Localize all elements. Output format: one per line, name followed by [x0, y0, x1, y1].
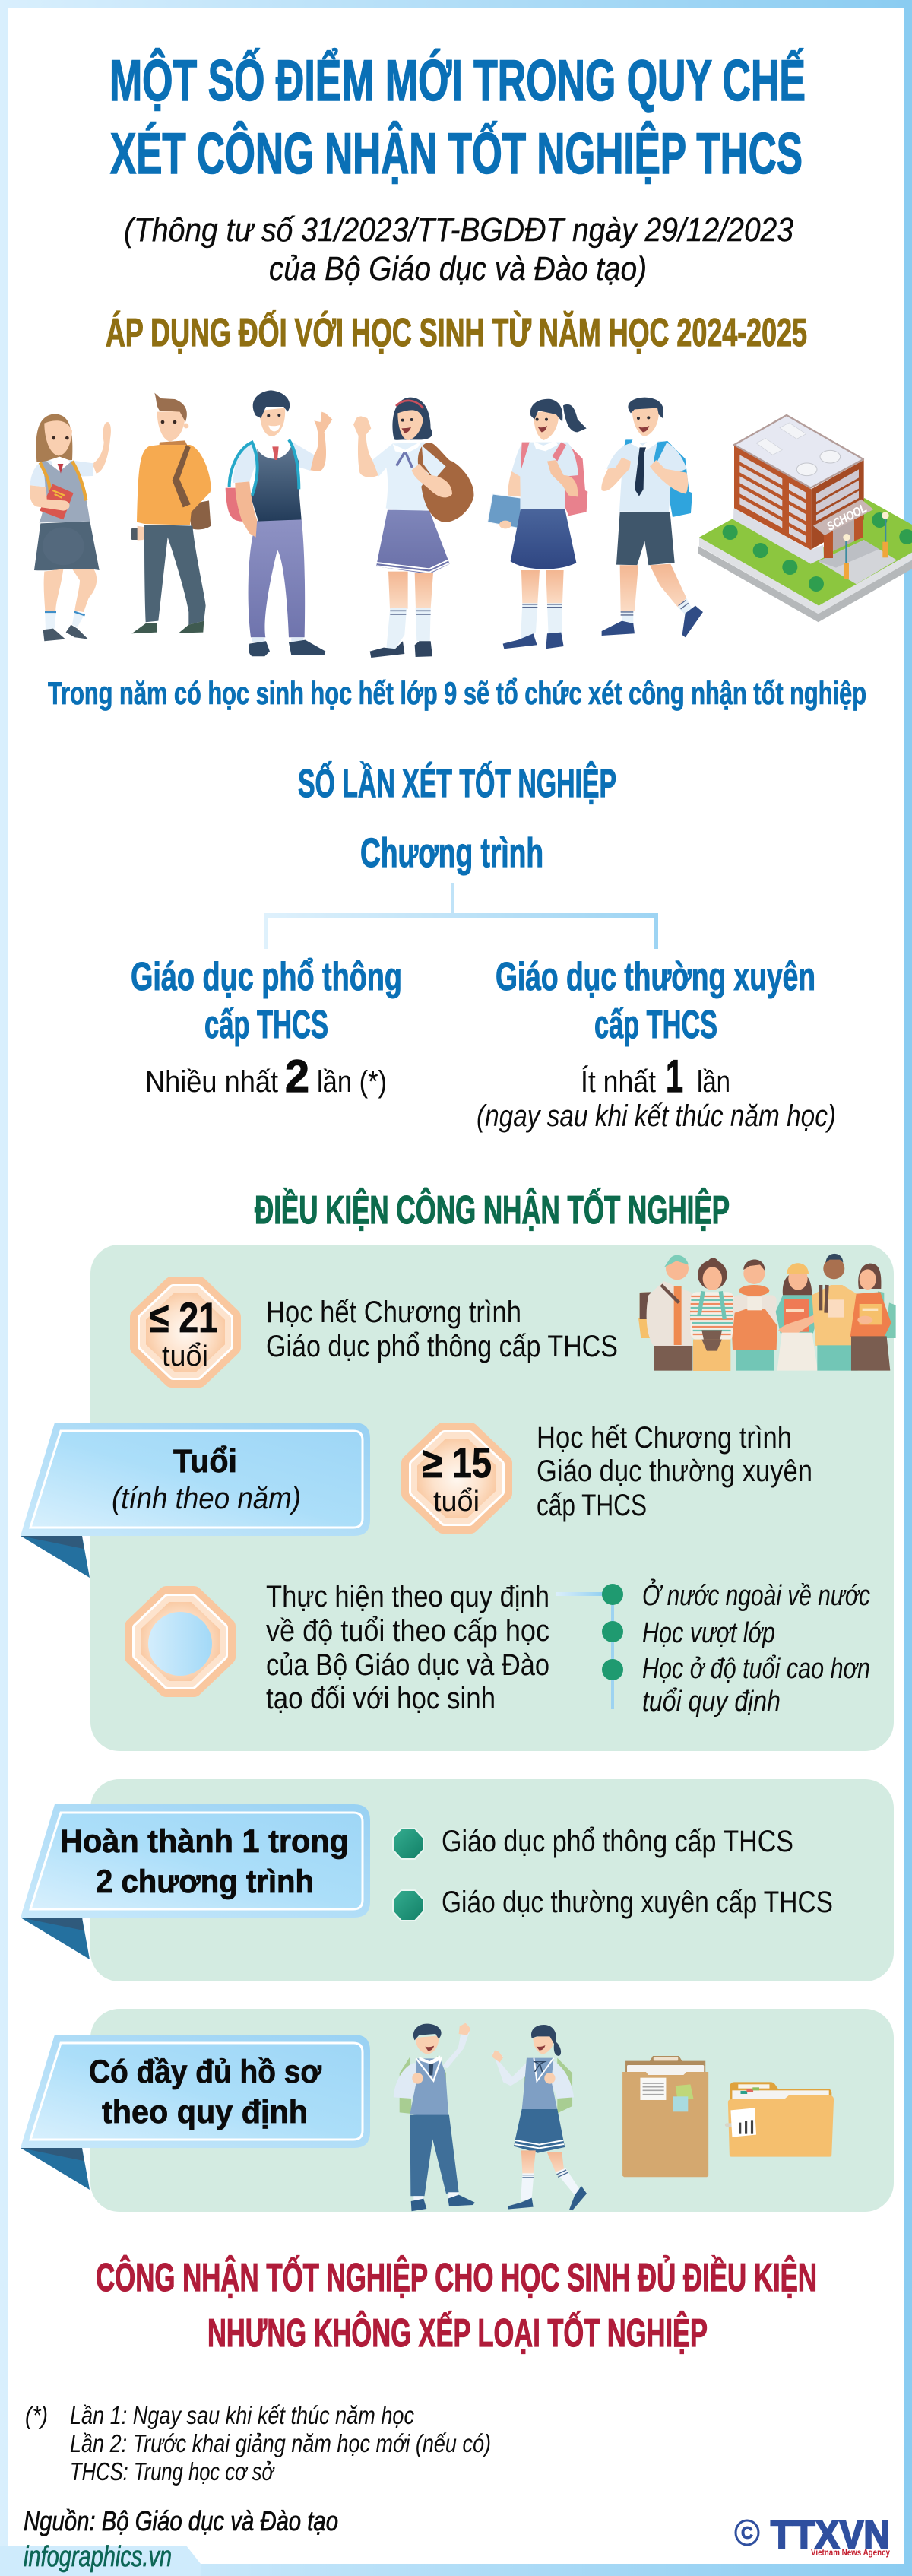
text: continuing education age: cấp THCS [537, 1489, 647, 1522]
badge: up to 21: ≤ 21 [150, 1293, 218, 1341]
footnotes: Lần 2: Trước khai giảng năm học mới (nếu có) [70, 2429, 491, 2457]
legal reference subtitle: (Thông tư số 31/2023/TT-BGDĐT ngày 29/12/2023 [124, 211, 793, 249]
icon: yellow folder with barcode label [725, 2082, 834, 2157]
illustration: student boy in orange hoodie [131, 393, 211, 633]
text: continuing education age: Giáo dục thường xuyên [537, 1455, 812, 1488]
badge: up to 21 [138, 1285, 233, 1379]
program column: general education: 2 [285, 1051, 309, 1102]
badge: from 15: ≥ 15 [423, 1439, 492, 1486]
label ribbon: complete one of two programs [21, 1804, 370, 1959]
label ribbon: age [21, 1423, 370, 1578]
program column: general education: Nhiều nhất [145, 1065, 278, 1099]
badge: from 15: tuổi [433, 1486, 480, 1518]
source: Nguồn: Bộ Giáo dục và Đào tạo [24, 2505, 338, 2536]
label ribbon: complete one of two programs: Hoàn thành 1 trong [60, 1823, 349, 1860]
footnotes: THCS: Trung học cơ sở [70, 2457, 275, 2486]
legal reference subtitle: của Bộ Giáo dục và Đào tạo) [269, 250, 647, 287]
bullet: continuing education: Giáo dục thường xuyên cấp THCS [442, 1886, 833, 1919]
conclusion [96, 2255, 817, 2356]
panel: program completion condition [21, 1779, 894, 1981]
badge: from 15 [410, 1431, 504, 1525]
illustration: student girl with brown bag [353, 398, 473, 658]
website: infographics.vn [24, 2541, 172, 2573]
text: age rule [266, 1580, 549, 1715]
illustration: student boy and girl waving [394, 2022, 587, 2211]
program column: continuing education [477, 955, 836, 1133]
label ribbon: complete one of two programs: 2 chương trình [96, 1864, 314, 1900]
label ribbon: age: Tuổi [173, 1443, 237, 1480]
text: age rule: tạo đối với học sinh [266, 1682, 496, 1715]
illustration: student girl with red book [30, 414, 111, 641]
exceptions list with connector: Học vượt lớp [642, 1617, 775, 1649]
program column: general education: lần (*) [317, 1065, 387, 1099]
illustration: student boy with blue backpack [601, 398, 703, 637]
footnotes: (*) [25, 2401, 48, 2429]
panel: age condition [21, 1245, 896, 1751]
text: general education age: Giáo dục phổ thông cấp THCS [266, 1330, 618, 1363]
program column: continuing education: 1 [666, 1051, 683, 1102]
illustration: isometric school building [698, 415, 912, 622]
text: age rule: về độ tuổi theo cấp học [266, 1614, 549, 1648]
program heading: Chương trình [360, 830, 543, 876]
exceptions list with connector: tuổi quy định [642, 1686, 781, 1718]
logo: TTXVN: Vietnam News Agency [811, 2547, 890, 2558]
badge: up to 21: tuổi [162, 1340, 208, 1372]
program column: general education [131, 955, 402, 1102]
illustration: student boy with navy vest [226, 390, 332, 656]
text: age rule: của Bộ Giáo dục và Đào [266, 1648, 549, 1682]
program column: general education: cấp THCS [204, 1003, 328, 1047]
program column: continuing education: cấp THCS [594, 1003, 717, 1047]
label ribbon: complete records [21, 2035, 370, 2190]
legal reference subtitle [124, 211, 793, 287]
footnotes [25, 2401, 491, 2486]
panel: records condition [21, 2009, 894, 2212]
icon: tan document folder [622, 2056, 708, 2177]
text: continuing education age: Học hết Chương trình [537, 1421, 792, 1455]
illustration: isometric school building: SCHOOL [825, 502, 869, 534]
illustration: group of six students [638, 1254, 896, 1371]
label ribbon: complete records: Có đầy đủ hồ sơ [89, 2054, 321, 2090]
label ribbon: complete records: theo quy định [102, 2094, 308, 2130]
logo: TTXVN: TTXVN [771, 2513, 890, 2557]
text: general education age: Học hết Chương trình [266, 1296, 521, 1329]
text: age rule: Thực hiện theo quy định [266, 1580, 549, 1613]
label ribbon: age: (tính theo năm) [112, 1482, 301, 1515]
program column: continuing education: (ngay sau khi kết thúc năm học) [477, 1099, 836, 1133]
text: general education age [266, 1296, 618, 1363]
icon: empty badge with blue circle [133, 1594, 227, 1689]
bullet: general education: Giáo dục phổ thông cấp THCS [442, 1825, 793, 1858]
illustration: student girl with ponytail and book [488, 399, 587, 649]
text: continuing education age [537, 1421, 812, 1522]
program column: general education: Giáo dục phổ thông [131, 955, 402, 999]
title [109, 48, 806, 186]
footnotes: Lần 1: Ngay sau khi kết thúc năm học [70, 2401, 414, 2429]
program column: continuing education: Ít nhất [581, 1064, 656, 1099]
exceptions list with connector [556, 1578, 870, 1718]
program column: continuing education: lần [697, 1065, 730, 1099]
section heading: number of reviews: SỐ LẦN XÉT TỐT NGHIỆP [298, 761, 616, 806]
tree connector [264, 883, 658, 949]
logo: TTXVN: C [741, 2523, 753, 2543]
